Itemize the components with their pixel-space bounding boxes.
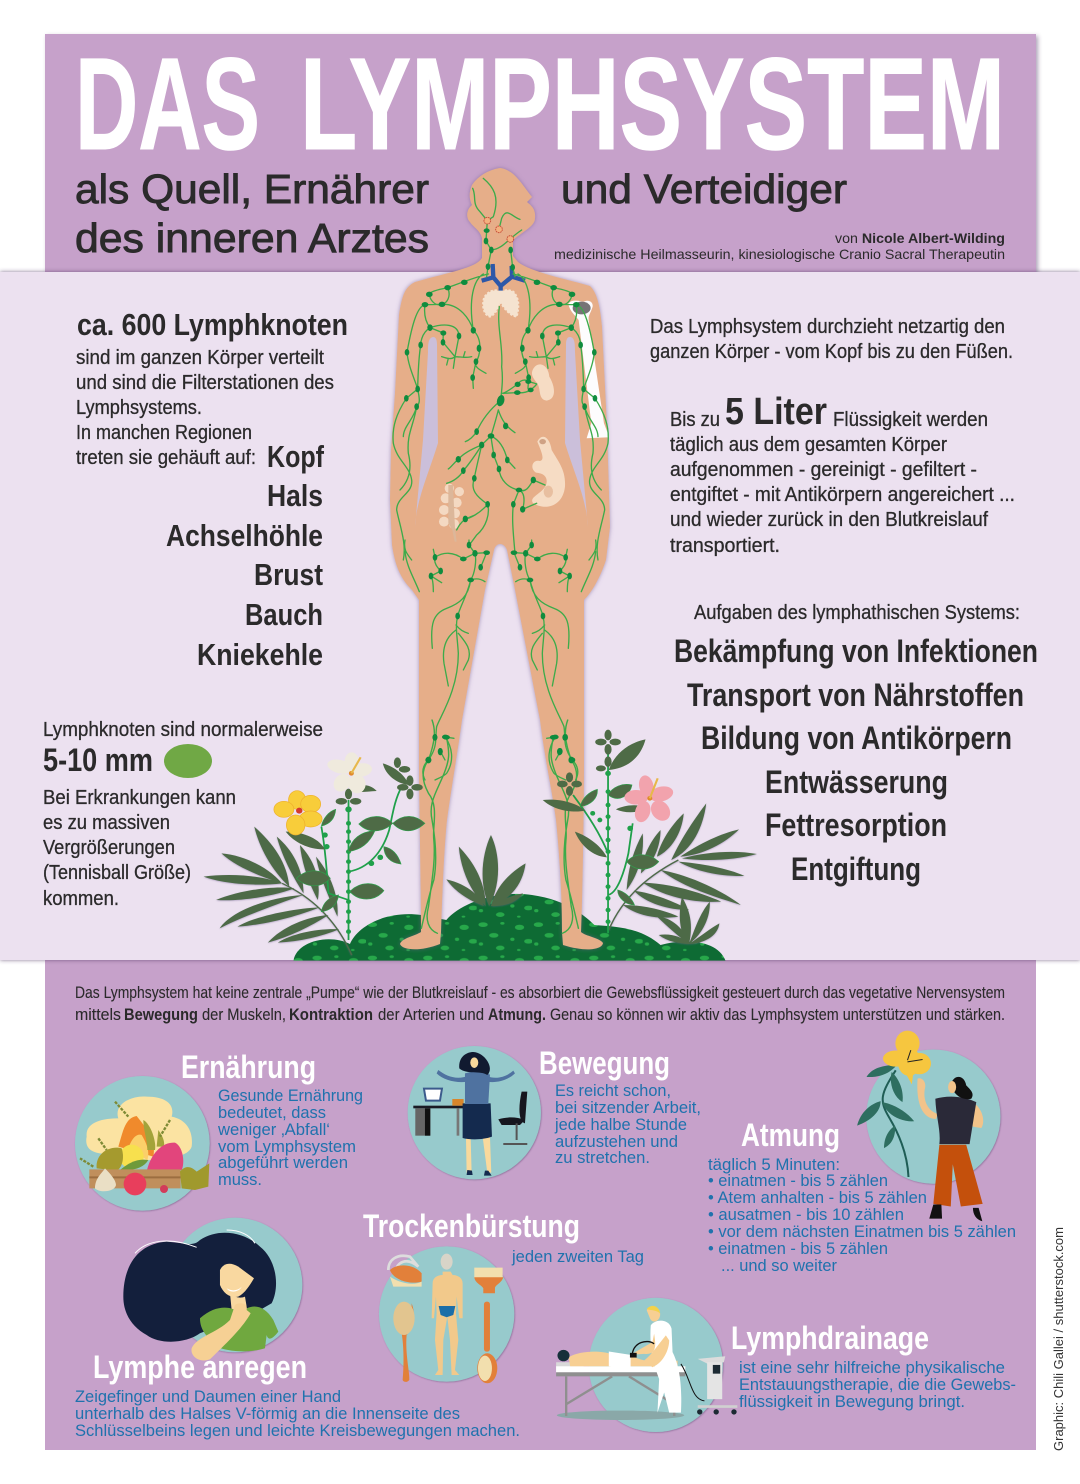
text: lymph node count: ca. 600 Lymphknoten [77, 307, 348, 342]
subtitle: als Quell, Ernährer [75, 166, 429, 212]
text: lymph node count: Lymphsystems. [76, 397, 202, 419]
text: five litres: transportiert. [670, 535, 780, 557]
text: lymph node count: In manchen Regionen [76, 422, 252, 444]
text: weniger ‚Abfall‘ [217, 1120, 330, 1139]
text: lymph node count: treten sie gehäuft auf: [76, 447, 256, 469]
list: tasks of the lymphatic system [674, 602, 1038, 887]
illustration: massage therapist and table [556, 1298, 737, 1432]
list: tasks of the lymphatic system: Transport von Nährstoffen [687, 677, 1024, 713]
intestine [439, 484, 464, 542]
list: body regions: Kopf [267, 439, 325, 474]
list: body regions: Hals [267, 478, 323, 513]
text: lymph node count [76, 307, 348, 469]
text [217, 1086, 363, 1189]
subtitle [75, 166, 847, 261]
text: intro to methods: Genau so können wir aktiv das Lymphsystem unterstützen und stärken. [550, 1005, 1005, 1024]
arm gap right [565, 337, 588, 527]
text: node size: 5-10 mm [43, 742, 153, 778]
text: jede halbe Stunde [554, 1115, 687, 1134]
text [554, 1081, 701, 1167]
arm gap left [415, 337, 438, 527]
illustration: stretching woman at desk [408, 1046, 541, 1179]
text: Schlüsselbeins legen und leichte Kreisbewegungen machen. [75, 1421, 520, 1440]
text: five litres [670, 391, 1015, 557]
icon: node size ellipse [164, 744, 212, 778]
text: zu stretchen. [555, 1148, 650, 1167]
man [432, 1272, 463, 1375]
text: five litres: Flüssigkeit werden [833, 409, 988, 431]
text: five litres: aufgenommen - gereinigt - gefiltert - [670, 459, 977, 481]
text: vom Lymphsystem [218, 1137, 356, 1156]
method: Lymphdrainage [556, 1298, 1016, 1432]
lymph vessels right mirror [513, 274, 608, 560]
text: muss. [218, 1170, 262, 1189]
illustration: food [75, 1076, 210, 1211]
brush top left [388, 1256, 418, 1273]
method: Ernährung [75, 1049, 363, 1211]
text: node size: (Tennisball Größe) [43, 862, 191, 884]
text: network intro [650, 316, 1013, 363]
text: node size: kommen. [43, 888, 119, 910]
text: Entstauungstherapie, die die Gewebs- [739, 1375, 1016, 1394]
brush top right [474, 1268, 503, 1278]
moss hill [294, 894, 726, 961]
text: bei sitzender Arbeit, [555, 1098, 701, 1117]
panel: bottom methods [45, 955, 1036, 1450]
list: body regions: Kniekehle [197, 637, 323, 672]
lymph vessels left [393, 274, 488, 560]
text: intro to methods: der Arterien und [378, 1005, 484, 1024]
text: bedeutet, dass [218, 1103, 326, 1122]
left palm [204, 827, 352, 955]
text: flüssigkeit in Bewegung bringt. [739, 1392, 965, 1411]
heading: Lymphe anregen [93, 1349, 307, 1385]
panel: lavender band [0, 272, 1080, 960]
text: five litres: 5 Liter [725, 391, 827, 433]
text: five litres: Bis zu [670, 409, 720, 431]
text: intro to methods: der Muskeln, [202, 1005, 286, 1024]
neck vessels and nodes [473, 178, 522, 277]
list: body regions: Bauch [245, 597, 323, 632]
list: body regions [166, 439, 325, 672]
list: tasks of the lymphatic system: Fettresorption [765, 807, 947, 843]
text: five litres: entgiftet - mit Antikörpern angereichert ... [670, 484, 1015, 506]
text: five litres: täglich aus dem gesamten Körper [670, 434, 947, 456]
text: • Atem anhalten - bis 5 zählen [708, 1188, 927, 1207]
text: intro to methods: mittels [75, 1005, 121, 1024]
text: unterhalb des Halses V-förmig an die Innenseite des [75, 1404, 460, 1423]
text: ist eine sehr hilfreiche physikalische [739, 1358, 1005, 1377]
left vine [286, 757, 425, 940]
text [75, 1387, 520, 1440]
bone joint [573, 302, 591, 314]
heading: Atmung [741, 1117, 840, 1153]
title: DAS [75, 30, 260, 177]
list: body regions: Brust [254, 557, 323, 592]
text: intro to methods: Kontraktion [289, 1005, 373, 1024]
graphic credit: Graphic: Chili Gallei / shutterstock.com [1051, 1227, 1066, 1451]
right vine [543, 730, 659, 933]
text: täglich 5 Minuten: [708, 1155, 840, 1174]
right palm [609, 803, 757, 944]
text: • vor dem nächsten Einatmen bis 5 zählen [708, 1222, 1016, 1241]
text: node size [43, 719, 323, 910]
list: tasks of the lymphatic system: Entgiftung [791, 851, 921, 887]
patient [569, 1352, 678, 1366]
bone [568, 301, 609, 438]
text: intro to methods [75, 983, 1005, 1024]
heading: Trockenbürstung [363, 1208, 580, 1244]
heading: Bewegung [539, 1045, 670, 1081]
list: tasks of the lymphatic system: Bildung von Antikörpern [701, 720, 1012, 756]
spleen [532, 364, 554, 401]
illustration: dry brushes and man [379, 1246, 514, 1383]
method: Bewegung [408, 1045, 701, 1179]
device [632, 1342, 654, 1354]
text: Zeigefinger und Daumen einer Hand [75, 1387, 341, 1406]
method: Atmung [708, 1031, 1016, 1275]
lower leg vessels right mirror [550, 720, 578, 933]
plants [204, 730, 757, 955]
text: node size: Vergrößerungen [43, 837, 175, 859]
text: abgeführt werden [218, 1153, 348, 1172]
text: Gesunde Ernährung [218, 1086, 363, 1105]
veins [482, 264, 525, 291]
heading: Ernährung [181, 1049, 316, 1085]
text: aufzustehen und [555, 1132, 678, 1151]
subtitle: und Verteidiger [561, 166, 847, 212]
green cross leaves [336, 757, 423, 805]
text: lymph node count: sind im ganzen Körper verteilt [76, 347, 324, 369]
brush left [402, 1303, 414, 1382]
list: tasks of the lymphatic system: Entwässerung [765, 764, 948, 800]
human body [390, 168, 610, 949]
lungs [483, 290, 518, 317]
text: node size: Bei Erkrankungen kann [43, 787, 236, 809]
text: • ausatmen - bis 10 zählen [708, 1205, 904, 1224]
text: jeden zweiten Tag [511, 1247, 644, 1266]
yellow flower [274, 791, 322, 835]
center agave [446, 835, 526, 906]
body silhouette [390, 168, 610, 949]
method: Lymphe anregen [75, 1218, 520, 1440]
text: lymph node count: und sind die Filterstationen des [76, 372, 334, 394]
text: five litres: und wieder zurück in den Blutkreislauf [670, 509, 988, 531]
organs and upper lymph vessels [393, 178, 609, 560]
illustration: woman with flower [857, 1031, 1000, 1221]
text [708, 1155, 1016, 1275]
central and abdominal vessels [447, 307, 545, 553]
text: ... und so weiter [721, 1256, 837, 1275]
brush right [484, 1302, 490, 1352]
text [739, 1358, 1016, 1411]
text: Es reicht schon, [555, 1081, 671, 1100]
text: intro to methods: Bewegung [124, 1005, 198, 1024]
author credit: medizinische Heilmasseurin, kinesiologische Cranio Sacral Therapeutin [554, 246, 1005, 262]
panel: header [45, 34, 1036, 279]
list: tasks of the lymphatic system: Aufgaben des lymphathischen Systems: [694, 602, 1020, 624]
text: • einatmen - bis 5 zählen [708, 1171, 888, 1190]
list: body regions: Achselhöhle [166, 518, 323, 553]
lower leg lymph vessels [421, 720, 578, 933]
text: • einatmen - bis 5 zählen [708, 1239, 888, 1258]
method: Trockenbürstung [363, 1208, 644, 1383]
text: intro to methods: Atmung. [488, 1005, 546, 1024]
thigh vessels right mirror [511, 540, 596, 780]
text: node size: es zu massiven [43, 812, 170, 834]
thigh lymph vessels [405, 540, 596, 780]
text: node size: Lymphknoten sind normalerweise [43, 719, 323, 741]
author credit: von Nicole Albert-Wilding [835, 230, 1005, 246]
table [556, 1362, 584, 1372]
therapist [650, 1321, 681, 1413]
text: network intro: ganzen Körper - vom Kopf bis zu den Füßen. [650, 341, 1013, 363]
subtitle: des inneren Arztes [75, 215, 429, 261]
illustration: woman massaging collarbone [123, 1218, 302, 1360]
text: network intro: Das Lymphsystem durchzieht netzartig den [650, 316, 1005, 338]
pink flower [624, 774, 675, 824]
white flower [326, 752, 373, 794]
heading: Lymphdrainage [731, 1320, 929, 1356]
stomach [532, 437, 565, 507]
author credit [554, 230, 1005, 262]
